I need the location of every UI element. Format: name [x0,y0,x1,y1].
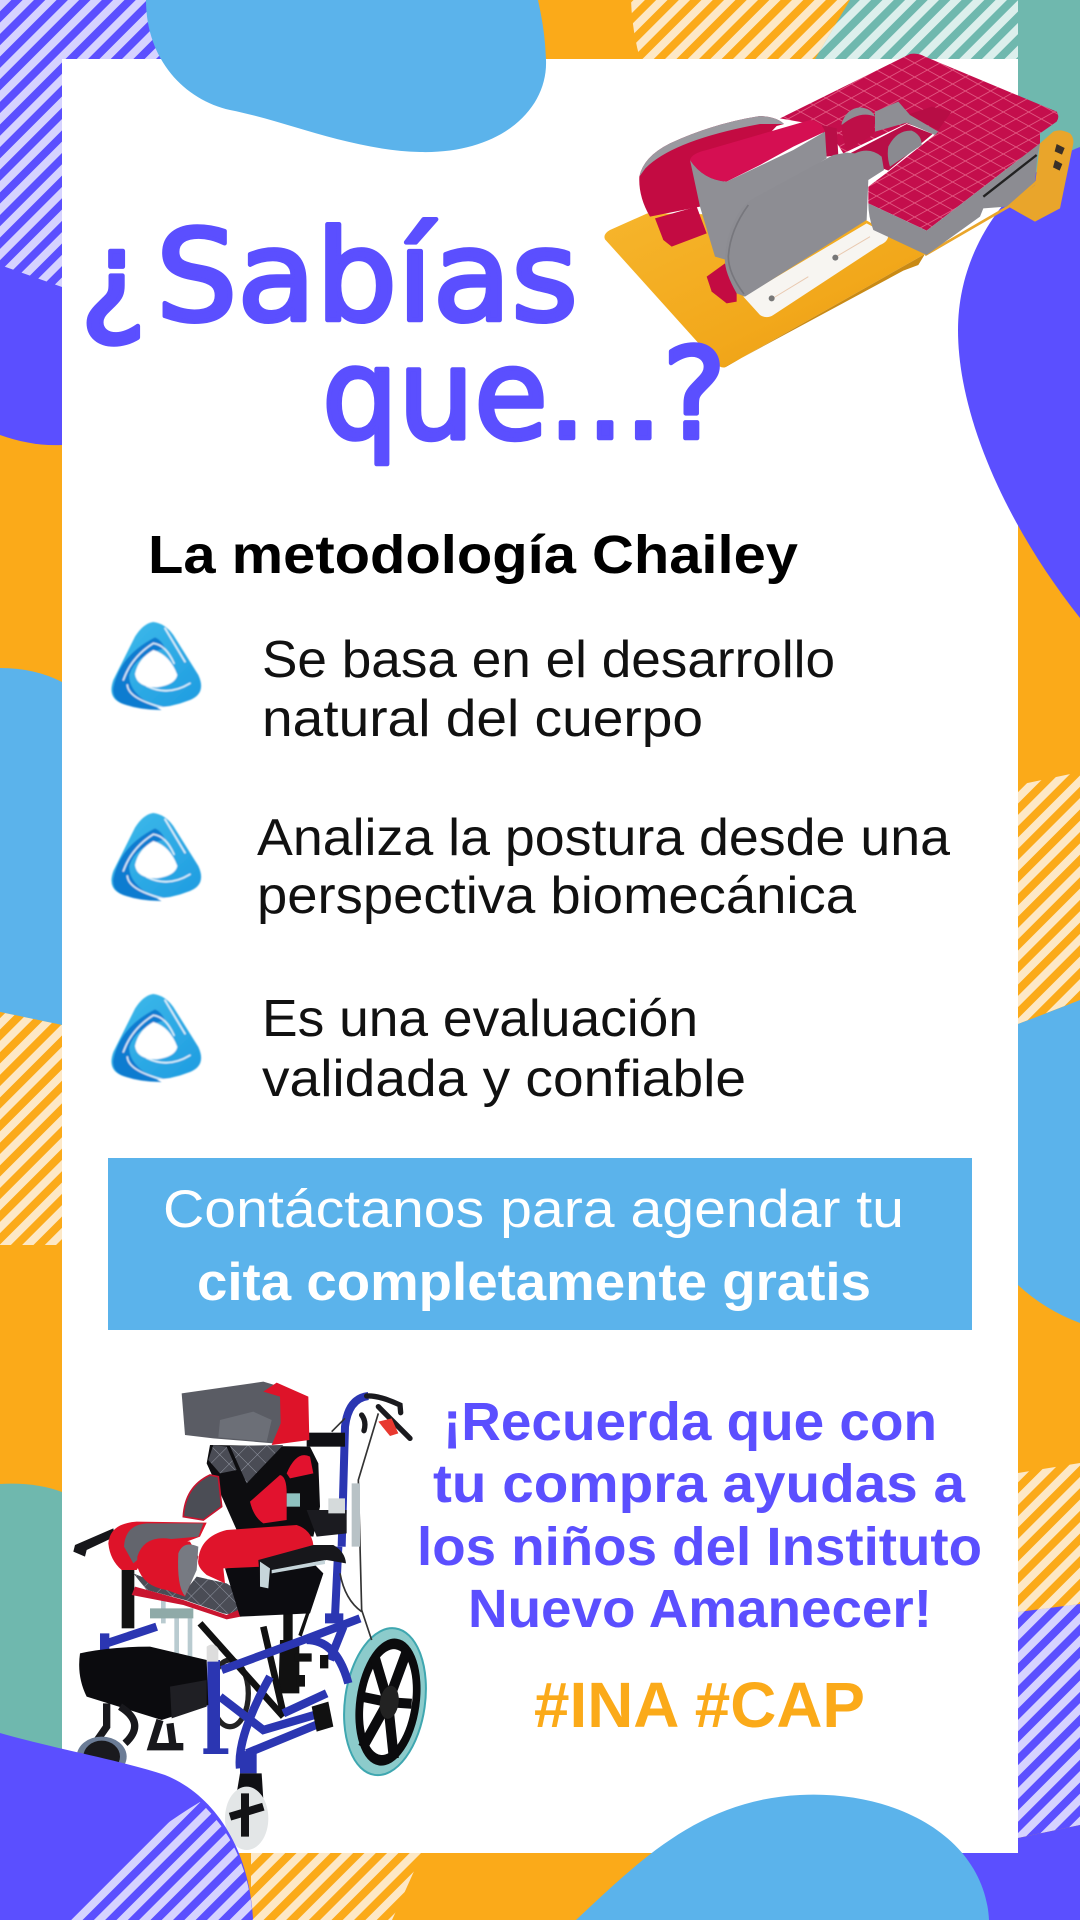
title: ¿ [80,203,147,350]
text: item 3 [262,990,746,1108]
black bar and arm left [73,1528,115,1557]
image: postural wheelchair [73,1382,435,1850]
reminder text: tu compra ayudas a [433,1454,966,1514]
text: item 1: Se basa en el desarrollo [262,631,835,689]
middle block [690,132,827,260]
title: que...? [322,321,726,468]
text: item 3: validada y confiable [262,1050,746,1108]
left red cushion [639,116,784,217]
blob: bottom-left purple [0,1733,253,1920]
list item 2 [111,809,950,925]
side pads [822,125,838,157]
handle [362,1396,410,1438]
reminder text: Nuevo Amanecer! [468,1579,932,1639]
call to action box [108,1158,972,1330]
text: item 1: natural del cuerpo [262,690,703,748]
icon: Chailey logo [111,813,201,901]
backrest [207,1445,320,1537]
back support bar [307,1433,345,1447]
list item 3 [111,990,746,1108]
front casters [77,1737,127,1777]
reminder text: ¡Recuerda que con [443,1392,937,1452]
reminder text [417,1392,982,1639]
wood bracket [1008,130,1073,222]
title [80,203,726,468]
image: Chailey positioning bed [604,54,1073,367]
headrest [182,1382,282,1443]
heading: La metodología Chailey [148,525,798,585]
footrest [79,1647,208,1720]
rear wheel [335,1623,435,1781]
seat pads [108,1522,207,1570]
call to action box: cita completamente gratis [197,1253,871,1312]
text: item 1 [262,631,835,748]
frame tubes [335,1396,368,1617]
text: item 2: Analiza la postura desde una [257,809,950,867]
list item 1 [111,622,835,748]
text: item 2: perspectiva biomecánica [257,867,856,925]
far wheel behind frame [212,1660,248,1727]
icon: Chailey logo [111,622,201,710]
mattress grey side [868,143,1040,255]
blob: top blue [146,0,546,152]
reminder text: los niños del Instituto [417,1517,982,1577]
blob: right purple [958,147,1080,618]
hashtags: #INA #CAP [534,1669,865,1741]
title: Sabías [156,203,578,350]
call to action box: Contáctanos para agendar tu [163,1180,904,1239]
text: item 2 [257,809,950,925]
quilted mattress [780,54,1058,231]
arm rest right [225,1557,323,1617]
text: item 3: Es una evaluación [262,990,698,1048]
blob: bottom blue [576,1795,989,1920]
front grey cushion [725,151,884,297]
icon: Chailey logo [111,994,201,1082]
stripes in purple blob [71,1802,253,1920]
